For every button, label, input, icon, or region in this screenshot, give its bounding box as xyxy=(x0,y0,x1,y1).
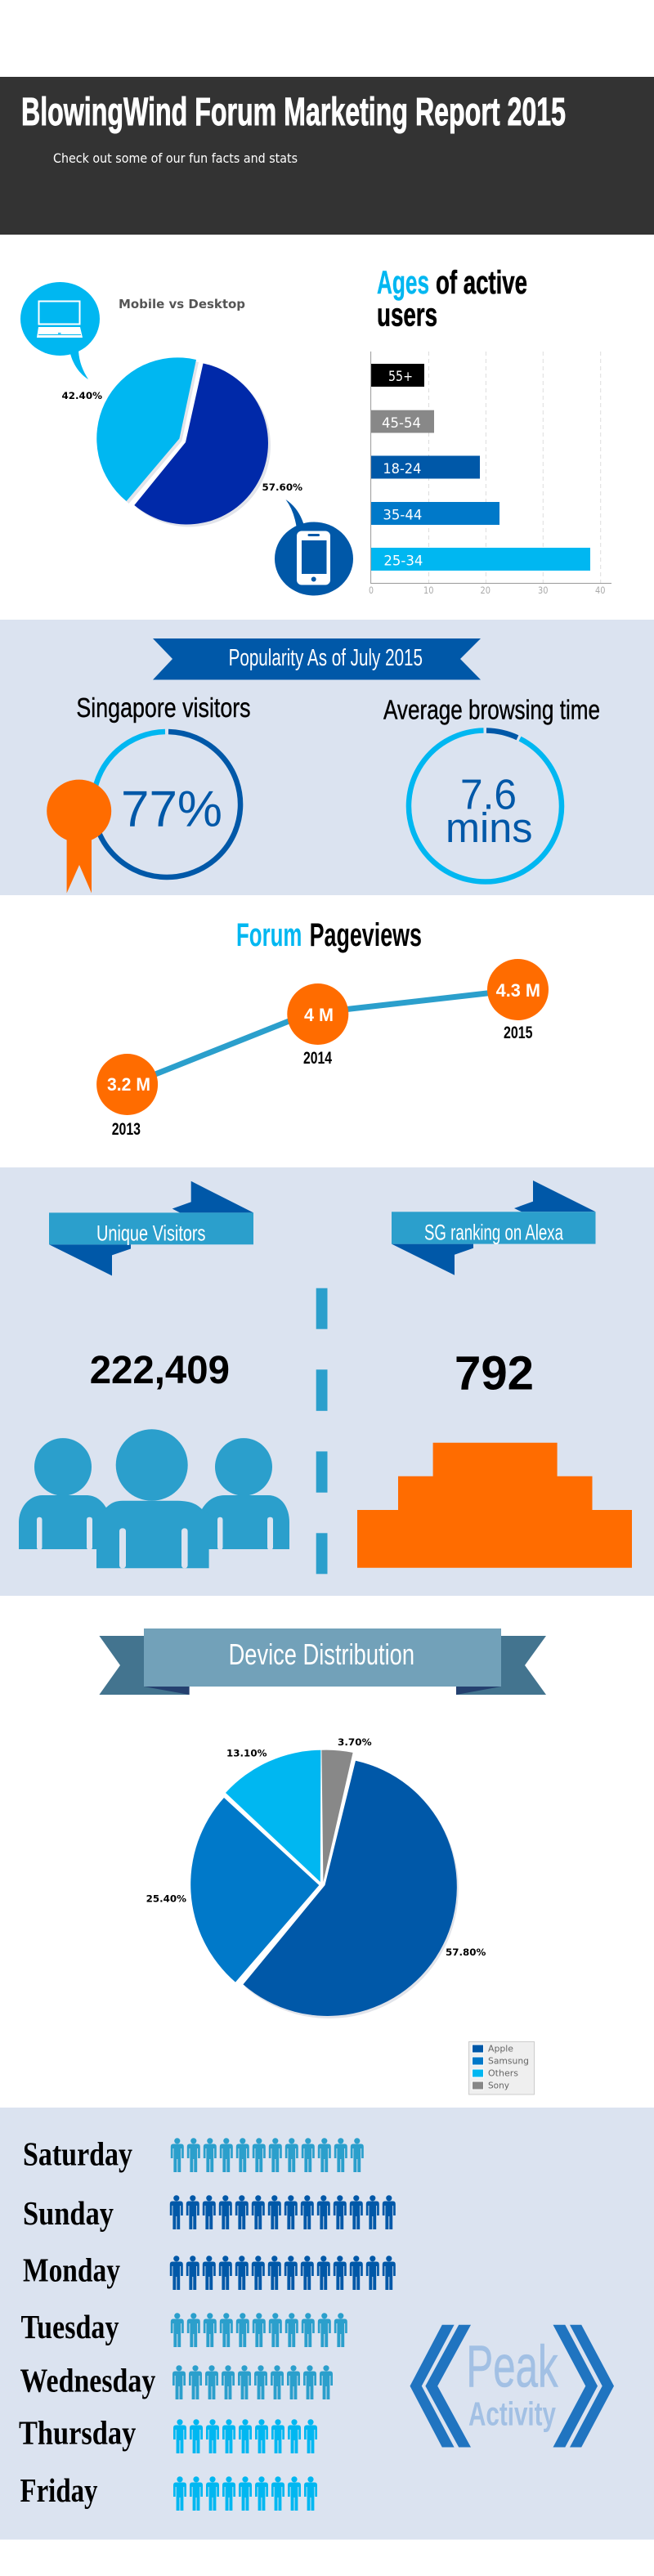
line chart: 2013 xyxy=(112,1119,141,1139)
line chart: 2014 xyxy=(303,1048,332,1068)
heading: of active xyxy=(436,265,527,301)
bar chart: ages: 40 xyxy=(595,585,605,596)
heading: users xyxy=(377,298,437,334)
pie chart: mobile vs desktop xyxy=(96,357,271,526)
ring chart: 7.6 mins xyxy=(409,731,562,881)
heading: singapore visitors: Singapore visitors xyxy=(76,693,251,724)
line chart: 2015 xyxy=(504,1023,533,1042)
line chart xyxy=(96,959,549,1139)
bar chart: ages xyxy=(369,352,611,596)
ring chart: 77%: 77% xyxy=(121,781,222,837)
panel: device distribution xyxy=(99,1628,546,2094)
panel: mobile vs desktop xyxy=(20,282,353,595)
label: desktop share: 42.40% xyxy=(62,390,102,401)
ribbon: sg ranking xyxy=(392,1180,595,1275)
label: apple share: 57.80% xyxy=(446,1947,486,1958)
label: sony share: 3.70% xyxy=(338,1736,372,1748)
icon: right chevrons xyxy=(553,2325,614,2448)
bar chart: ages: 0 xyxy=(369,585,374,596)
label: saturday: Saturday xyxy=(23,2135,132,2173)
bar chart: ages: 25-34 xyxy=(383,553,423,569)
label: friday: Friday xyxy=(20,2471,98,2509)
icon: left chevrons xyxy=(410,2325,471,2448)
pictogram row: friday xyxy=(173,2476,317,2511)
heading: average browsing time: Average browsing time xyxy=(383,695,600,726)
legend: Apple xyxy=(488,2044,513,2054)
callout: peak: Peak xyxy=(466,2334,558,2399)
subtitle: Check out some of our fun facts and stats xyxy=(53,150,298,166)
label: thursday: Thursday xyxy=(19,2413,137,2451)
icon: orange award badge xyxy=(47,780,111,893)
legend xyxy=(469,2042,535,2094)
ribbon heading: Popularity As of July 2015 xyxy=(229,645,423,671)
icon: phone speech bubble xyxy=(275,500,353,595)
pictogram row: monday xyxy=(170,2256,396,2290)
ring chart: 7.6 mins: 7.6 xyxy=(460,771,517,818)
bar chart: ages: 45-54 xyxy=(382,415,421,432)
label: sunday: Sunday xyxy=(23,2194,114,2232)
line chart: 3.2 M xyxy=(107,1074,150,1095)
callout: activity: Activity xyxy=(468,2395,556,2432)
panel: visitors and ranking xyxy=(0,1167,654,1596)
legend: Others xyxy=(488,2068,518,2078)
heading: Ages xyxy=(377,265,429,301)
bar chart: ages: 35-44 xyxy=(383,507,422,523)
label: mobile share: 57.60% xyxy=(262,482,302,493)
heading xyxy=(236,917,422,953)
legend: Samsung xyxy=(488,2055,529,2067)
label: tuesday: Tuesday xyxy=(21,2308,119,2345)
bar chart: ages: 55+ xyxy=(388,369,413,385)
panel: popularity xyxy=(0,620,654,895)
banner heading: Device Distribution xyxy=(229,1637,414,1671)
panel: forum pageviews xyxy=(96,917,549,1139)
bar chart: ages: 20 xyxy=(481,585,490,596)
label: monday: Monday xyxy=(23,2251,120,2289)
heading: Pageviews xyxy=(310,917,422,953)
ribbon heading xyxy=(153,638,481,680)
heading xyxy=(377,265,527,334)
pictogram row: saturday xyxy=(171,2138,364,2172)
panel: ages of active users xyxy=(369,265,611,596)
bar chart: ages: 10 xyxy=(423,585,433,596)
chart title: Mobile vs Desktop xyxy=(119,297,245,311)
pie chart: devices xyxy=(190,1750,459,2018)
bar chart: ages: 30 xyxy=(538,585,548,596)
ribbon: unique visitors xyxy=(49,1181,253,1275)
label: samsung share: 25.40% xyxy=(146,1893,186,1905)
banner heading xyxy=(99,1628,546,1695)
legend: Sony xyxy=(488,2080,509,2091)
ring chart: 7.6 mins: mins xyxy=(446,804,533,851)
icon: orange podium xyxy=(357,1443,632,1568)
pictogram row: wednesday xyxy=(172,2365,333,2399)
line chart: 4 M xyxy=(304,1005,334,1025)
pictogram row: tuesday xyxy=(171,2313,347,2347)
label: others share: 13.10% xyxy=(226,1748,267,1759)
icon: group of people xyxy=(19,1429,289,1568)
ring chart: 77% xyxy=(93,732,240,877)
heading: Forum xyxy=(236,917,302,953)
label: wednesday: Wednesday xyxy=(20,2362,156,2399)
panel: header xyxy=(0,77,654,235)
icon: laptop speech bubble xyxy=(20,282,100,379)
bar chart: ages: 18-24 xyxy=(383,461,421,477)
line chart: 4.3 M xyxy=(496,980,540,1001)
pictogram row: sunday xyxy=(170,2195,396,2229)
ribbon: sg ranking: SG ranking on Alexa xyxy=(424,1220,564,1244)
panel: peak activity xyxy=(0,2108,654,2539)
number: alexa rank: 792 xyxy=(455,1347,534,1400)
ribbon: unique visitors: Unique Visitors xyxy=(96,1221,206,1246)
pictogram row: thursday xyxy=(173,2419,317,2453)
number: unique visitors: 222,409 xyxy=(90,1349,230,1392)
